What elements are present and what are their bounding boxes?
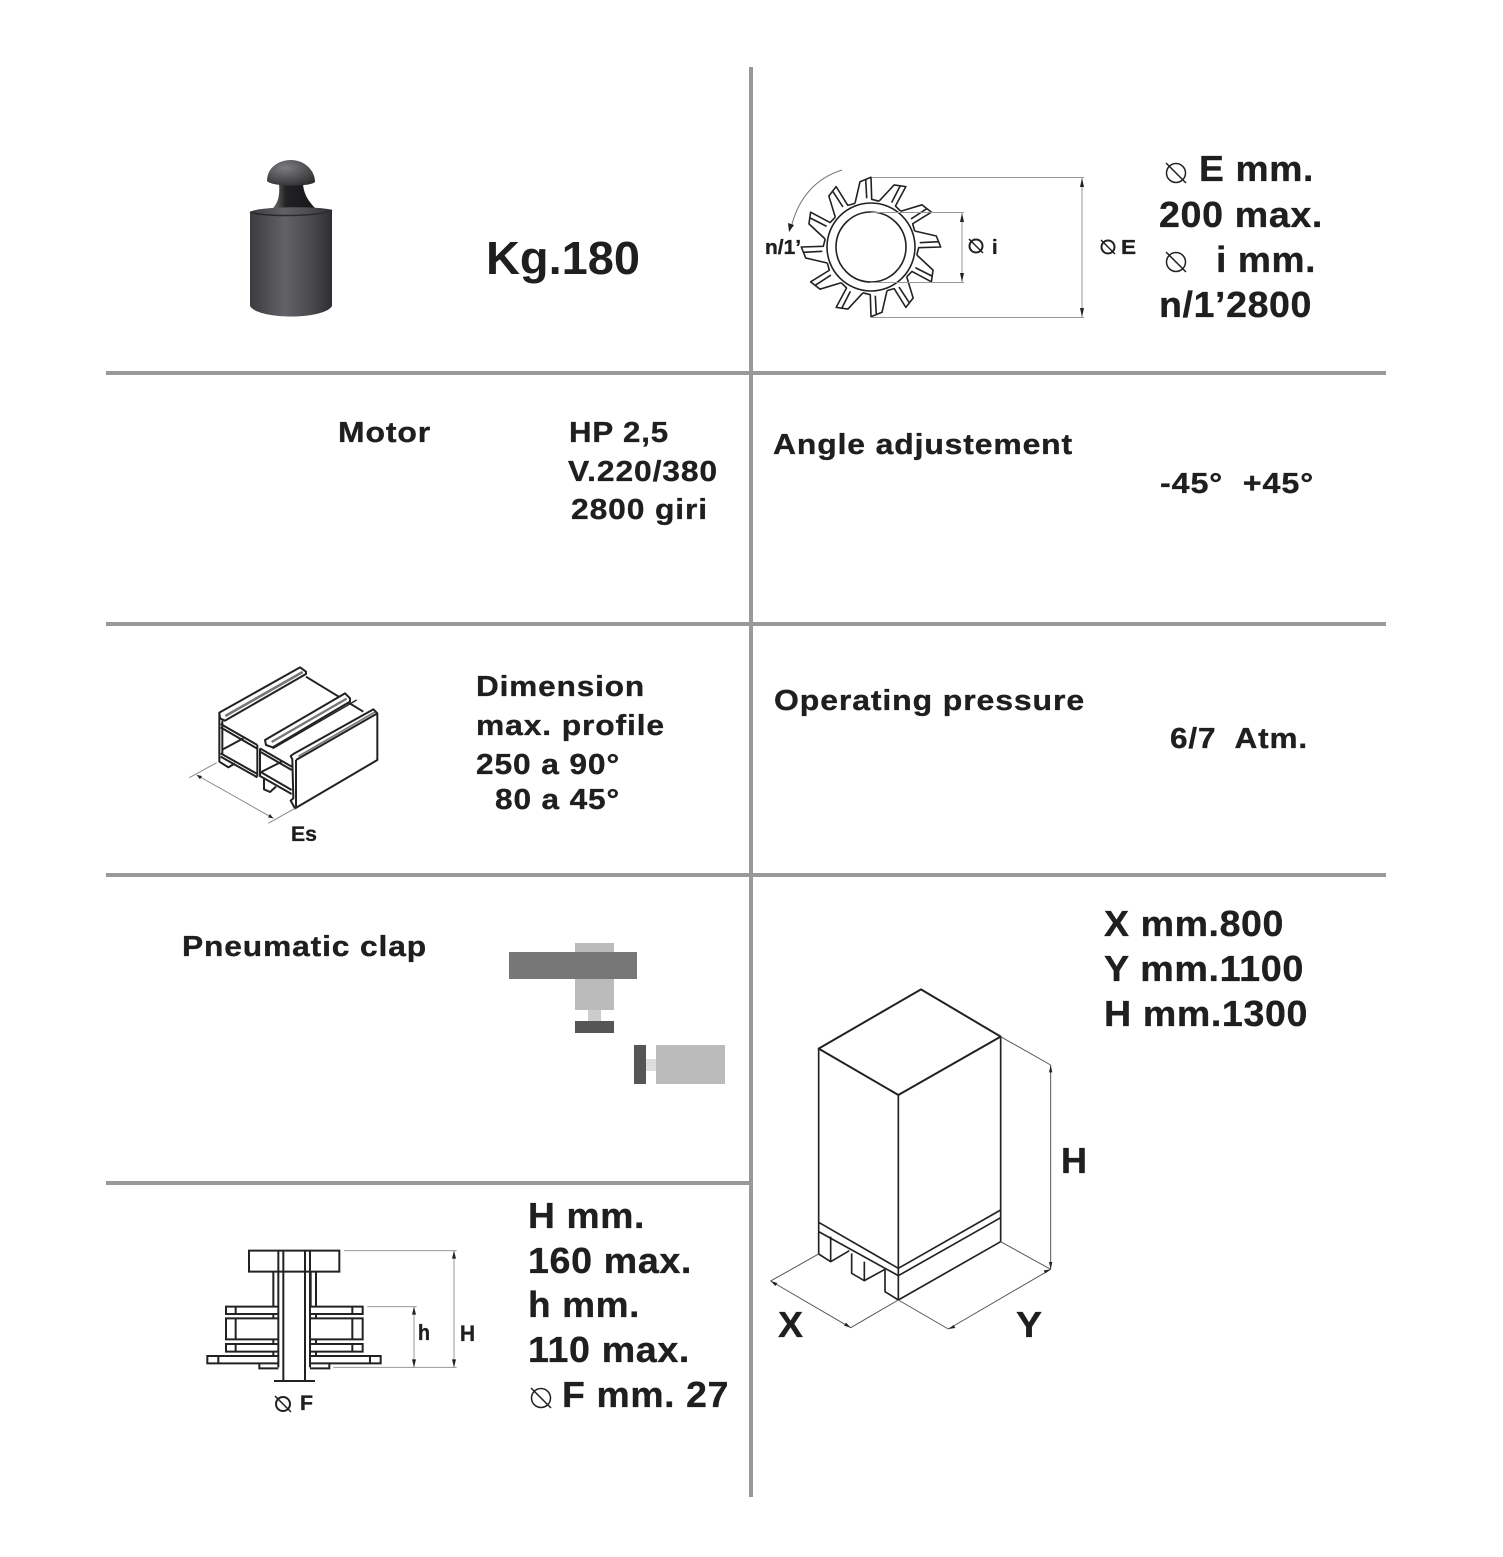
cutter stack specifications: 110 max. — [528, 1329, 690, 1370]
operating pressure value: 6/7 Atm. — [1170, 723, 1308, 755]
profile width label: Es — [291, 823, 317, 846]
cutter stack specifications: H mm. — [528, 1195, 645, 1236]
motor label: Motor — [338, 417, 431, 449]
crate specifications: X mm.800 — [1104, 903, 1284, 944]
icon: weight — [250, 160, 332, 316]
crate specifications — [1104, 903, 1308, 1034]
diagram: milling cutter: E — [1121, 237, 1136, 259]
cutter specifications: i mm. — [1216, 239, 1316, 280]
crate specifications: H mm.1300 — [1104, 993, 1308, 1034]
diagram: cutter stack — [207, 1251, 457, 1381]
diagram: packaged crate — [771, 989, 1052, 1329]
maximum profile dimensions: max. profile — [476, 710, 665, 742]
stack dimension labels: H — [460, 1321, 475, 1346]
stack dimension labels — [275, 1320, 475, 1415]
cutter stack specifications: 160 max. — [528, 1240, 692, 1281]
motor specifications: V.220/380 — [568, 456, 718, 488]
diagram: milling cutter — [765, 170, 1136, 318]
motor specifications: 2800 giri — [571, 494, 708, 526]
angle adjustment value: -45° +45° — [1160, 468, 1314, 500]
crate dimension labels — [778, 1140, 1087, 1345]
crate dimension labels: H — [1061, 1140, 1087, 1181]
cutter stack specifications: h mm. — [528, 1284, 640, 1325]
pneumatic clamp label: Pneumatic clap — [182, 931, 427, 963]
maximum profile dimensions: 80 a 45° — [495, 784, 620, 816]
cutter specifications: 200 max. — [1159, 194, 1323, 235]
weight value: Kg.180 — [486, 232, 640, 284]
cutter stack specifications — [528, 1195, 729, 1415]
crate dimension labels: X — [778, 1304, 803, 1345]
maximum profile dimensions: Dimension — [476, 671, 645, 703]
diagram: milling cutter: n/1’ — [765, 237, 801, 259]
maximum profile dimensions — [476, 671, 665, 816]
maximum profile dimensions: 250 a 90° — [476, 749, 620, 781]
stack dimension labels: F — [300, 1392, 313, 1415]
cutter stack specifications: F mm. 27 — [562, 1374, 729, 1415]
diagram: pneumatic clamps — [509, 943, 725, 1084]
stack dimension labels: h — [418, 1320, 430, 1345]
cutter specifications: n/1’2800 — [1159, 284, 1312, 325]
cutter specifications: E mm. — [1199, 148, 1314, 189]
crate specifications: Y mm.1100 — [1104, 948, 1304, 989]
cutter specifications — [1159, 148, 1323, 325]
motor specifications: HP 2,5 — [569, 417, 669, 449]
angle adjustment label: Angle adjustement — [773, 429, 1073, 461]
motor specifications — [568, 417, 718, 526]
icon: aluminium profile — [189, 667, 377, 823]
diagram: milling cutter: i — [992, 237, 998, 259]
crate dimension labels: Y — [1016, 1304, 1042, 1345]
operating pressure label: Operating pressure — [774, 685, 1085, 717]
